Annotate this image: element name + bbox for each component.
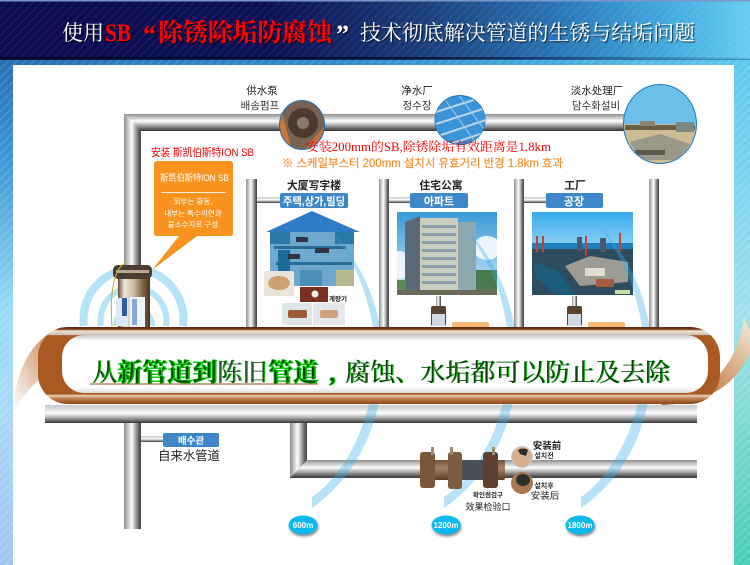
label: after: 설치후 [534, 481, 554, 490]
illustration: house cutaway [264, 211, 360, 325]
banner slogan: 管道 [268, 359, 318, 387]
product heading: 安装 斯凯伯斯特ION SB [151, 145, 254, 159]
label: pump [241, 84, 280, 112]
distance marker 1200m [432, 516, 460, 534]
photo: apartment block [390, 212, 501, 295]
distance marker 1800m: 1800m [568, 521, 592, 530]
badge: water main: 배수관 [178, 435, 204, 447]
label: water purification: 정수장 [403, 100, 432, 112]
callout: product note [152, 161, 233, 270]
distance marker 1800m [566, 516, 594, 534]
label: tap water pipe: 自来水管道 [158, 448, 220, 463]
label: after: 安装后 [531, 490, 560, 502]
label: water purification: 净水厂 [401, 84, 433, 97]
label: desalination [571, 85, 623, 112]
title: ” [336, 20, 349, 49]
label: desalination: 淡水处理厂 [571, 85, 623, 97]
badge: water main [163, 433, 219, 447]
title: 使用 [62, 21, 104, 45]
lower pipe network [45, 405, 697, 529]
top pipe network [124, 114, 659, 327]
badge: factory [546, 193, 603, 208]
label: before [533, 440, 562, 460]
callout: product note: 斯凯伯斯特ION SB [160, 172, 229, 184]
badge: factory: 공장 [564, 195, 584, 208]
icon: desalination plant photo [622, 84, 698, 166]
range arc 1800m [580, 208, 652, 508]
title: 除锈除垢防腐蚀 [158, 19, 334, 47]
label: before: 安装前 [533, 440, 562, 452]
banner slogan [90, 359, 671, 387]
banner slogan: 陈旧 [217, 359, 267, 387]
badge: apartment [410, 193, 468, 208]
small devices [431, 296, 582, 326]
building 3 label: 工厂 [564, 179, 586, 192]
label: after [531, 481, 560, 502]
building 1 label: 大厦写字楼 [287, 178, 341, 192]
title: “ [143, 20, 156, 49]
title: SB [105, 20, 131, 47]
banner slogan: 新管道到 [117, 359, 217, 387]
illustration: house cutaway: 계량기 [329, 294, 347, 303]
banner slogan: 从 [92, 360, 117, 387]
range arc 600m [306, 208, 383, 508]
device: main scale buster [111, 263, 152, 327]
callout: product note: 외부는 황동, [174, 196, 212, 206]
building 2 label: 住宅公寓 [419, 178, 463, 192]
distance marker 1200m: 1200m [434, 521, 458, 530]
label: water purification [401, 84, 433, 112]
badge: apartment: 아파트 [424, 195, 454, 208]
title: 技术彻底解决管道的生锈与结垢问题 [360, 21, 695, 45]
distance marker 600m: 600m [293, 521, 313, 530]
icon: pump photo [278, 100, 326, 150]
distance marker 600m [288, 516, 318, 534]
icon: purification plant photo [434, 94, 486, 146]
banner slogan: 腐蚀、水垢都可以防止及去除 [345, 359, 671, 387]
label: pump: 供水泵 [246, 84, 278, 97]
signal rings [84, 269, 184, 326]
label: pump: 배송펌프 [241, 100, 280, 112]
icon: pipe before [512, 446, 532, 468]
red caption: 安装200mm的SB,除锈除垢有效距离是1.8km [306, 139, 551, 154]
label: inspection port: 效果检验口 [466, 501, 510, 512]
label: desalination: 담수화설비 [572, 100, 620, 112]
orange Korean caption: ※ 스케일부스터 200mm 설치시 유효거리 반경 1.8km 효과 [282, 156, 563, 170]
header bar [0, 0, 750, 60]
callout: product note: 불소수지로 구성 [168, 220, 218, 229]
badge: homes: 주택,상가,빌딩 [283, 194, 345, 208]
icon: pipe after [511, 472, 533, 494]
ribbon banner [13, 318, 750, 413]
range arc 1200m [443, 208, 517, 508]
title [62, 19, 695, 49]
label: inspection port: 확인점검구 [473, 490, 503, 499]
inspection fitting [420, 447, 505, 489]
photo: industrial plant [532, 212, 633, 295]
small orange tags [452, 322, 625, 328]
banner slogan: , [329, 360, 335, 387]
label: inspection port [466, 490, 510, 512]
label: before: 설치전 [534, 451, 554, 460]
callout: product note: 내부는 특수이연과 [164, 208, 222, 218]
